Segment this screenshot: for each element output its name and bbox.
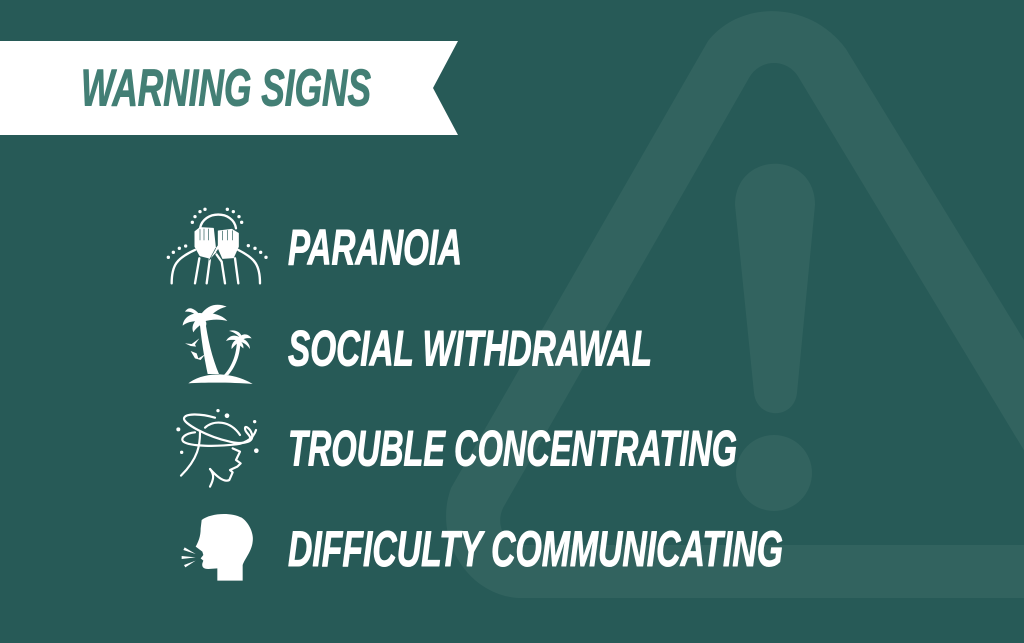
warning item: social withdrawal bbox=[183, 305, 652, 384]
title: WARNING SIGNS bbox=[81, 60, 371, 118]
icon: palm trees on island bbox=[183, 305, 253, 384]
icon: hands covering face bbox=[167, 208, 268, 283]
warning item: trouble concentrating bbox=[176, 409, 737, 487]
warning item: difficulty communicating bbox=[182, 514, 783, 581]
background warning triangle bbox=[446, 11, 1024, 598]
title ribbon bbox=[0, 41, 458, 135]
label: PARANOIA bbox=[288, 220, 462, 276]
icon: speaking head bbox=[182, 514, 253, 581]
icon: dizzy head bbox=[176, 409, 259, 487]
label: DIFFICULTY COMMUNICATING bbox=[288, 521, 783, 577]
label: SOCIAL WITHDRAWAL bbox=[288, 320, 652, 376]
label: TROUBLE CONCENTRATING bbox=[288, 420, 737, 476]
warning item: paranoia bbox=[167, 208, 462, 283]
